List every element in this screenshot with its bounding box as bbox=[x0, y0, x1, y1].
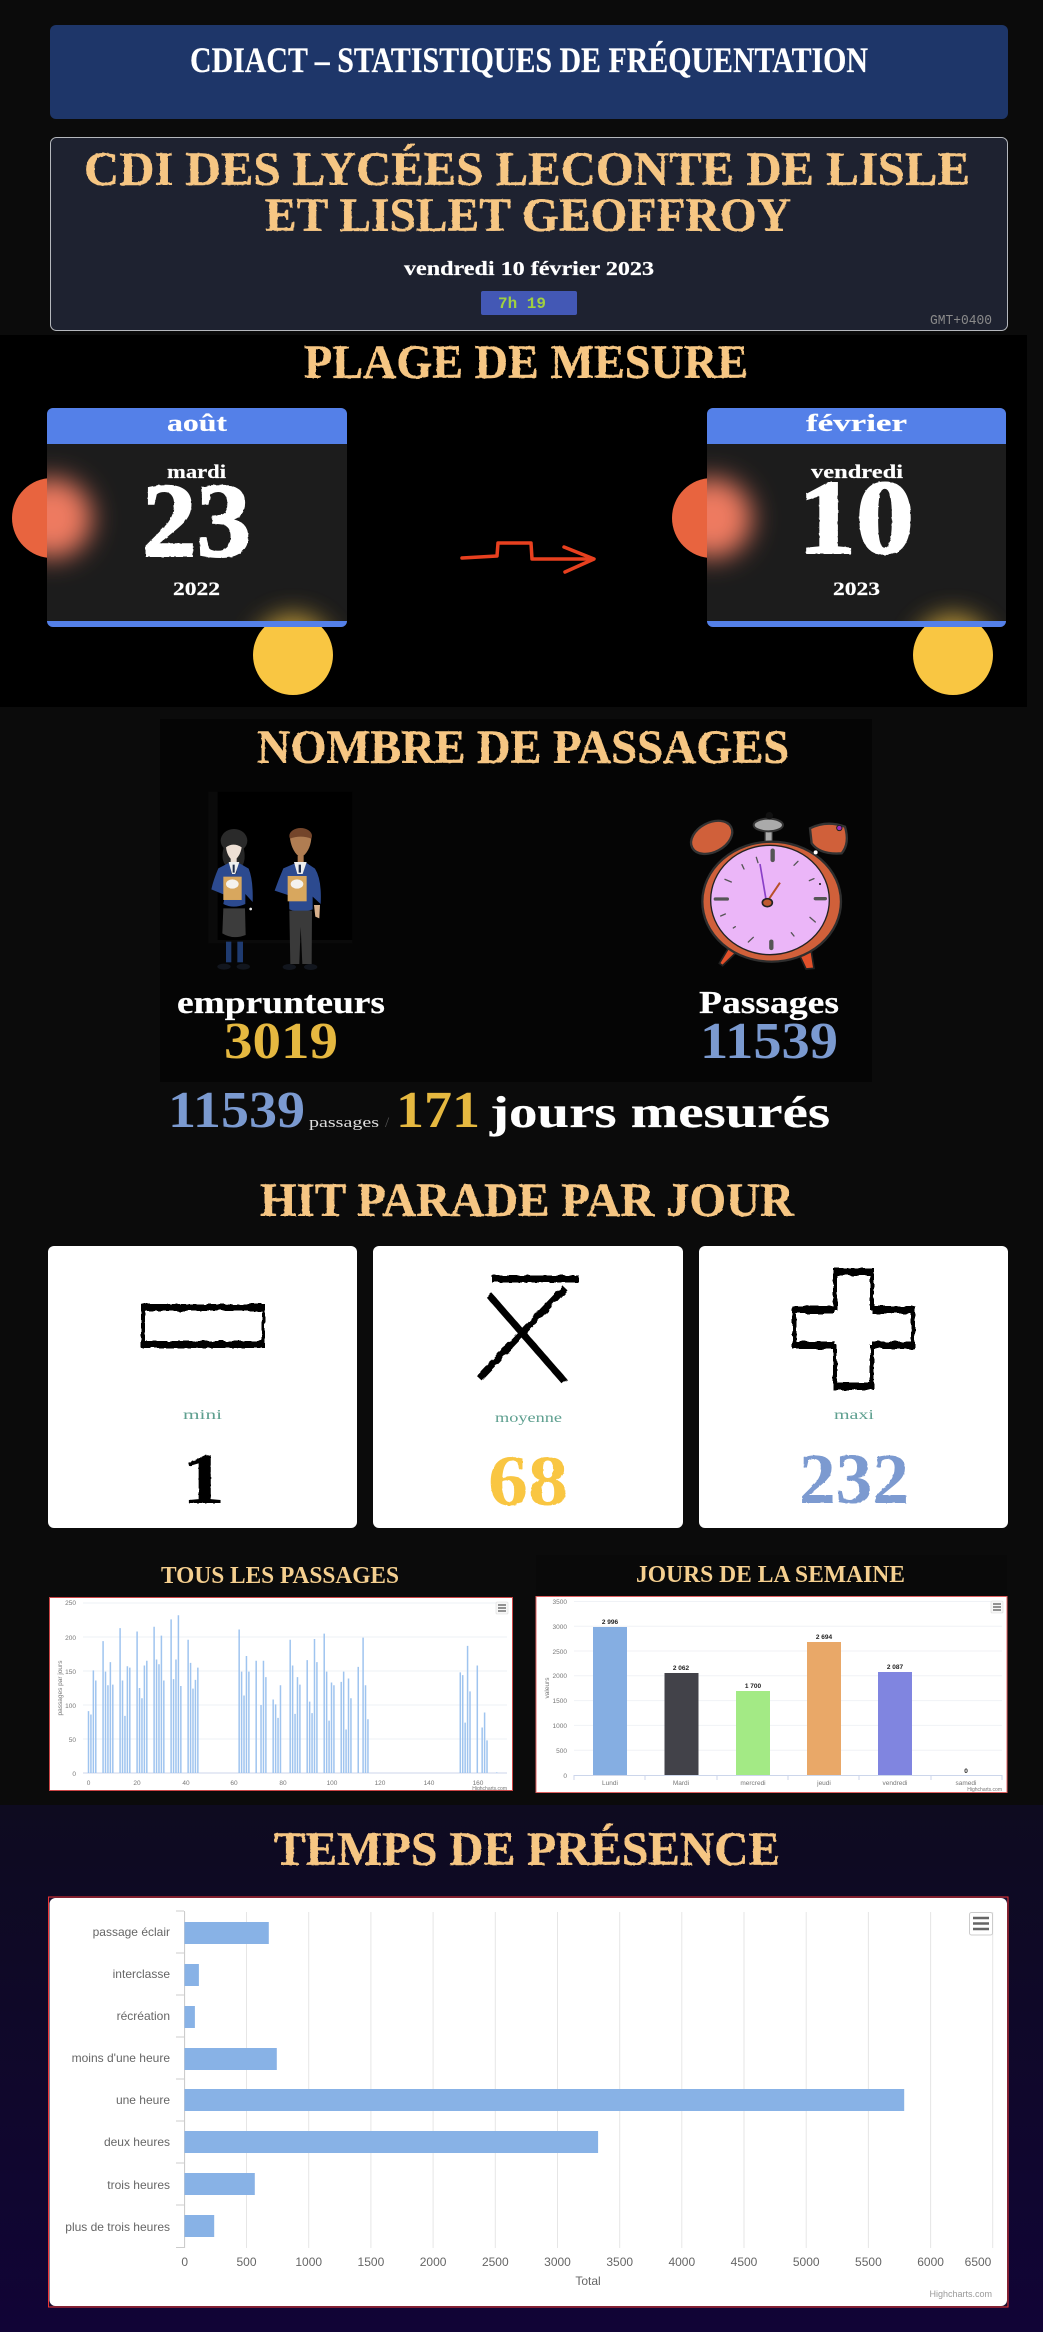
y axis labels: 0 bbox=[563, 1773, 567, 1780]
year: 2022 bbox=[173, 579, 220, 600]
value axis labels: 5500 bbox=[855, 2255, 882, 2269]
category labels: deux heures bbox=[104, 2135, 170, 2149]
value axis labels: 5000 bbox=[793, 2255, 820, 2269]
stat: emprunteurs bbox=[177, 984, 385, 1070]
current date: vendredi 10 février 2023 bbox=[404, 258, 654, 280]
y axis title: valeurs bbox=[544, 1677, 551, 1698]
value axis labels: 0 bbox=[181, 2255, 188, 2269]
bars bbox=[593, 1627, 912, 1775]
icon: two students holding books bbox=[208, 792, 352, 970]
x axis labels: 60 bbox=[230, 1780, 238, 1787]
summary: passages per measured day: 11539 bbox=[168, 1082, 305, 1139]
y axis labels: 3500 bbox=[553, 1599, 567, 1606]
panel: establishment and current date bbox=[50, 138, 1008, 330]
value labels: 2 062 bbox=[673, 1665, 690, 1672]
category labels: une heure bbox=[116, 2093, 170, 2107]
chart: passages by weekday bbox=[536, 1596, 1007, 1793]
category labels: Mardi bbox=[673, 1780, 689, 1787]
boy bbox=[275, 828, 321, 970]
timezone: GMT+0400 bbox=[930, 313, 992, 329]
y axis title: passages par jours bbox=[57, 1660, 64, 1715]
y axis labels: 100 bbox=[65, 1703, 76, 1710]
icon: alarm clock bbox=[685, 812, 847, 969]
label: maxi: maxi bbox=[834, 1408, 874, 1423]
y axis labels: 250 bbox=[65, 1600, 76, 1607]
gridlines bbox=[185, 1912, 993, 2248]
calendar card: end date bbox=[672, 408, 1006, 695]
value axis labels: 1000 bbox=[295, 2255, 322, 2269]
value axis labels: 6000 bbox=[917, 2255, 944, 2269]
value labels: 2 087 bbox=[887, 1664, 904, 1671]
value axis labels: 500 bbox=[236, 2255, 257, 2269]
stat: passages: 11539 bbox=[700, 1013, 838, 1070]
category labels: passage éclair bbox=[93, 1925, 170, 1939]
x axis labels: 120 bbox=[375, 1780, 386, 1787]
y axis labels: 3000 bbox=[553, 1624, 567, 1631]
value labels: 2 694 bbox=[816, 1634, 833, 1641]
category labels: trois heures bbox=[107, 2178, 170, 2192]
summary: passages per measured day: passages bbox=[309, 1115, 379, 1131]
x axis bbox=[83, 1772, 507, 1774]
value: maxi: 232 bbox=[799, 1439, 909, 1519]
icon: x-bar average bbox=[479, 1279, 579, 1382]
value labels: 2 996 bbox=[602, 1619, 619, 1626]
credit: Highcharts.com bbox=[967, 1787, 1002, 1793]
month: août bbox=[167, 411, 227, 437]
label: mini: mini bbox=[183, 1408, 222, 1423]
panel: nombre de passages bbox=[160, 719, 872, 1082]
y axis labels: 2500 bbox=[553, 1649, 567, 1656]
heading: temps de presence: TEMPS DE PRÉSENCE bbox=[274, 1823, 780, 1876]
banner: application title: CDIACT – STATISTIQUES DE FRÉQUENTATION bbox=[190, 40, 868, 80]
category labels: plus de trois heures bbox=[65, 2220, 170, 2234]
y axis labels: 1000 bbox=[553, 1723, 567, 1730]
credit: Highcharts.com bbox=[929, 2289, 992, 2299]
summary: passages per measured day bbox=[168, 1082, 830, 1139]
time pill: 7h 19 bbox=[498, 295, 546, 313]
summary: passages per measured day: jours mesurés bbox=[489, 1088, 830, 1137]
heading: establishment name bbox=[84, 143, 970, 242]
category labels bbox=[65, 1925, 170, 2234]
heading panel: jours de la semaine: JOURS DE LA SEMAINE bbox=[636, 1562, 905, 1588]
y axis labels: 200 bbox=[65, 1635, 76, 1642]
value: mini: 1 bbox=[182, 1439, 225, 1519]
y axis and ticks bbox=[176, 1911, 184, 2248]
gridlines bbox=[83, 1603, 507, 1739]
x axis labels: 140 bbox=[424, 1780, 435, 1787]
value axis labels bbox=[181, 2255, 992, 2269]
category labels: mercredi bbox=[740, 1780, 766, 1787]
category labels: récréation bbox=[117, 2009, 170, 2023]
y axis labels: 500 bbox=[556, 1748, 567, 1755]
summary: passages per measured day: / bbox=[385, 1115, 390, 1131]
gridlines bbox=[574, 1602, 1002, 1750]
value axis labels: 4500 bbox=[731, 2255, 758, 2269]
month: février bbox=[806, 411, 907, 437]
label: moyenne: moyenne bbox=[495, 1411, 562, 1426]
x axis bbox=[574, 1775, 1002, 1780]
summary: passages per measured day: 171 bbox=[396, 1082, 480, 1139]
x axis labels: 20 bbox=[133, 1780, 141, 1787]
card: mini bbox=[48, 1246, 357, 1528]
weekday: mardi bbox=[167, 462, 226, 483]
calendar card: start date bbox=[12, 408, 347, 695]
weekday: vendredi bbox=[811, 462, 903, 483]
heading: establishment name: ET LISLET GEOFFROY bbox=[265, 189, 791, 242]
x axis labels: 100 bbox=[327, 1780, 338, 1787]
chart: all daily passages bbox=[50, 1598, 512, 1792]
y axis labels: 1500 bbox=[553, 1698, 567, 1705]
x axis labels bbox=[87, 1780, 484, 1787]
chart: time spent bbox=[48, 1897, 1008, 2307]
menu button bbox=[991, 1601, 1003, 1613]
axis title: Total bbox=[575, 2274, 601, 2288]
time pill bbox=[481, 291, 577, 315]
bars bbox=[88, 1615, 497, 1773]
section: plage de mesure bbox=[0, 335, 1027, 707]
category labels: vendredi bbox=[883, 1780, 907, 1787]
value labels bbox=[602, 1619, 968, 1775]
x axis labels: 0 bbox=[87, 1780, 91, 1787]
category labels: jeudi bbox=[816, 1780, 831, 1787]
stat: passages: Passages bbox=[699, 984, 839, 1020]
bars bbox=[184, 1922, 904, 2237]
category labels bbox=[602, 1780, 976, 1787]
value: moyenne: 68 bbox=[488, 1441, 568, 1521]
y axis labels bbox=[553, 1599, 567, 1780]
heading: plage de mesure: PLAGE DE MESURE bbox=[304, 336, 748, 389]
x axis labels: 80 bbox=[279, 1780, 287, 1787]
category labels: interclasse bbox=[113, 1967, 170, 1981]
heading panel: jours de la semaine bbox=[536, 1555, 1007, 1596]
menu button bbox=[970, 1912, 992, 1935]
credit: Highcharts.com bbox=[472, 1786, 507, 1792]
heading: nombre de passages: NOMBRE DE PASSAGES bbox=[257, 721, 789, 774]
card: moyenne bbox=[373, 1246, 683, 1528]
y axis labels: 0 bbox=[72, 1771, 76, 1778]
value axis labels: 2500 bbox=[482, 2255, 509, 2269]
card: maxi bbox=[699, 1246, 1008, 1528]
icon: plus bbox=[794, 1270, 913, 1388]
icon: minus bbox=[141, 1304, 265, 1348]
menu button bbox=[496, 1602, 508, 1614]
stat: emprunteurs: emprunteurs bbox=[177, 984, 385, 1020]
banner: application title bbox=[50, 25, 1008, 119]
category labels: moins d'une heure bbox=[72, 2051, 170, 2065]
y axis labels bbox=[65, 1600, 76, 1778]
heading: establishment name: CDI DES LYCÉES LECONTE DE LISLE bbox=[84, 143, 970, 196]
value labels: 0 bbox=[964, 1768, 968, 1775]
y axis labels: 150 bbox=[65, 1669, 76, 1676]
year: 2023 bbox=[833, 579, 880, 600]
y axis labels: 50 bbox=[69, 1737, 76, 1744]
value axis labels: 1500 bbox=[358, 2255, 385, 2269]
value axis labels: 3000 bbox=[544, 2255, 571, 2269]
arrow: start to end bbox=[462, 543, 594, 572]
x axis labels: 40 bbox=[182, 1780, 190, 1787]
section: temps de presence bbox=[0, 1805, 1043, 2332]
day number: 23 bbox=[142, 462, 251, 579]
stat: emprunteurs: 3019 bbox=[224, 1013, 338, 1070]
value axis labels: 2000 bbox=[420, 2255, 447, 2269]
x axis labels: 160 bbox=[473, 1780, 484, 1787]
day number: 10 bbox=[798, 459, 914, 576]
value axis labels: 4000 bbox=[668, 2255, 695, 2269]
y axis labels: 2000 bbox=[553, 1673, 567, 1680]
heading: tous les passages: TOUS LES PASSAGES bbox=[161, 1563, 399, 1589]
value axis labels: 6500 bbox=[965, 2255, 992, 2269]
stat: passages bbox=[699, 984, 839, 1070]
value labels: 1 700 bbox=[745, 1683, 762, 1690]
heading: hit parade par jour: HIT PARADE PAR JOUR bbox=[260, 1174, 795, 1227]
category labels: samedi bbox=[956, 1780, 976, 1787]
value axis labels: 3500 bbox=[606, 2255, 633, 2269]
category labels: Lundi bbox=[602, 1780, 618, 1787]
girl bbox=[211, 829, 253, 970]
